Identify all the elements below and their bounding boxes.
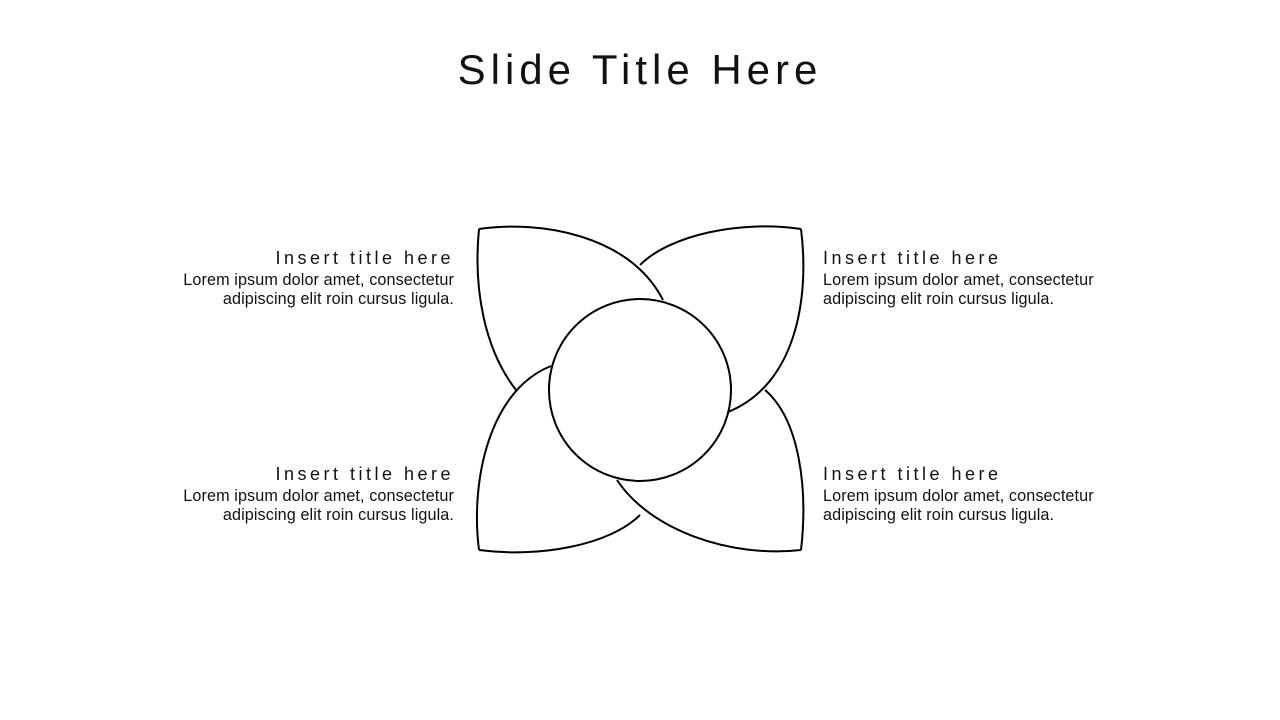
petal: top-right bbox=[640, 226, 803, 412]
text: top-right: Insert title here bbox=[823, 248, 1002, 268]
text: bottom-left: adipiscing elit roin cursus ligula. bbox=[223, 506, 454, 524]
center circle bbox=[549, 299, 731, 481]
petal: bottom-left bbox=[477, 366, 640, 552]
text: bottom-right bbox=[823, 464, 1094, 524]
text: bottom-left bbox=[183, 464, 454, 524]
text: top-left: Lorem ipsum dolor amet, consectetur bbox=[183, 271, 454, 289]
text: top-right: adipiscing elit roin cursus ligula. bbox=[823, 290, 1054, 308]
petal: bottom-right bbox=[617, 390, 803, 551]
text: bottom-left: Lorem ipsum dolor amet, consectetur bbox=[183, 487, 454, 505]
text: bottom-left: Insert title here bbox=[275, 464, 454, 484]
text: bottom-right: Insert title here bbox=[823, 464, 1002, 484]
text: top-left: Insert title here bbox=[275, 248, 454, 268]
petal: top-left bbox=[478, 227, 663, 390]
text: bottom-right: adipiscing elit roin cursus ligula. bbox=[823, 506, 1054, 524]
text: top-left: adipiscing elit roin cursus ligula. bbox=[223, 290, 454, 308]
text: top-left bbox=[183, 248, 454, 308]
text: top-right bbox=[823, 248, 1094, 308]
title: Slide Title Here bbox=[458, 46, 822, 93]
text: bottom-right: Lorem ipsum dolor amet, consectetur bbox=[823, 487, 1094, 505]
text: top-right: Lorem ipsum dolor amet, consectetur bbox=[823, 271, 1094, 289]
